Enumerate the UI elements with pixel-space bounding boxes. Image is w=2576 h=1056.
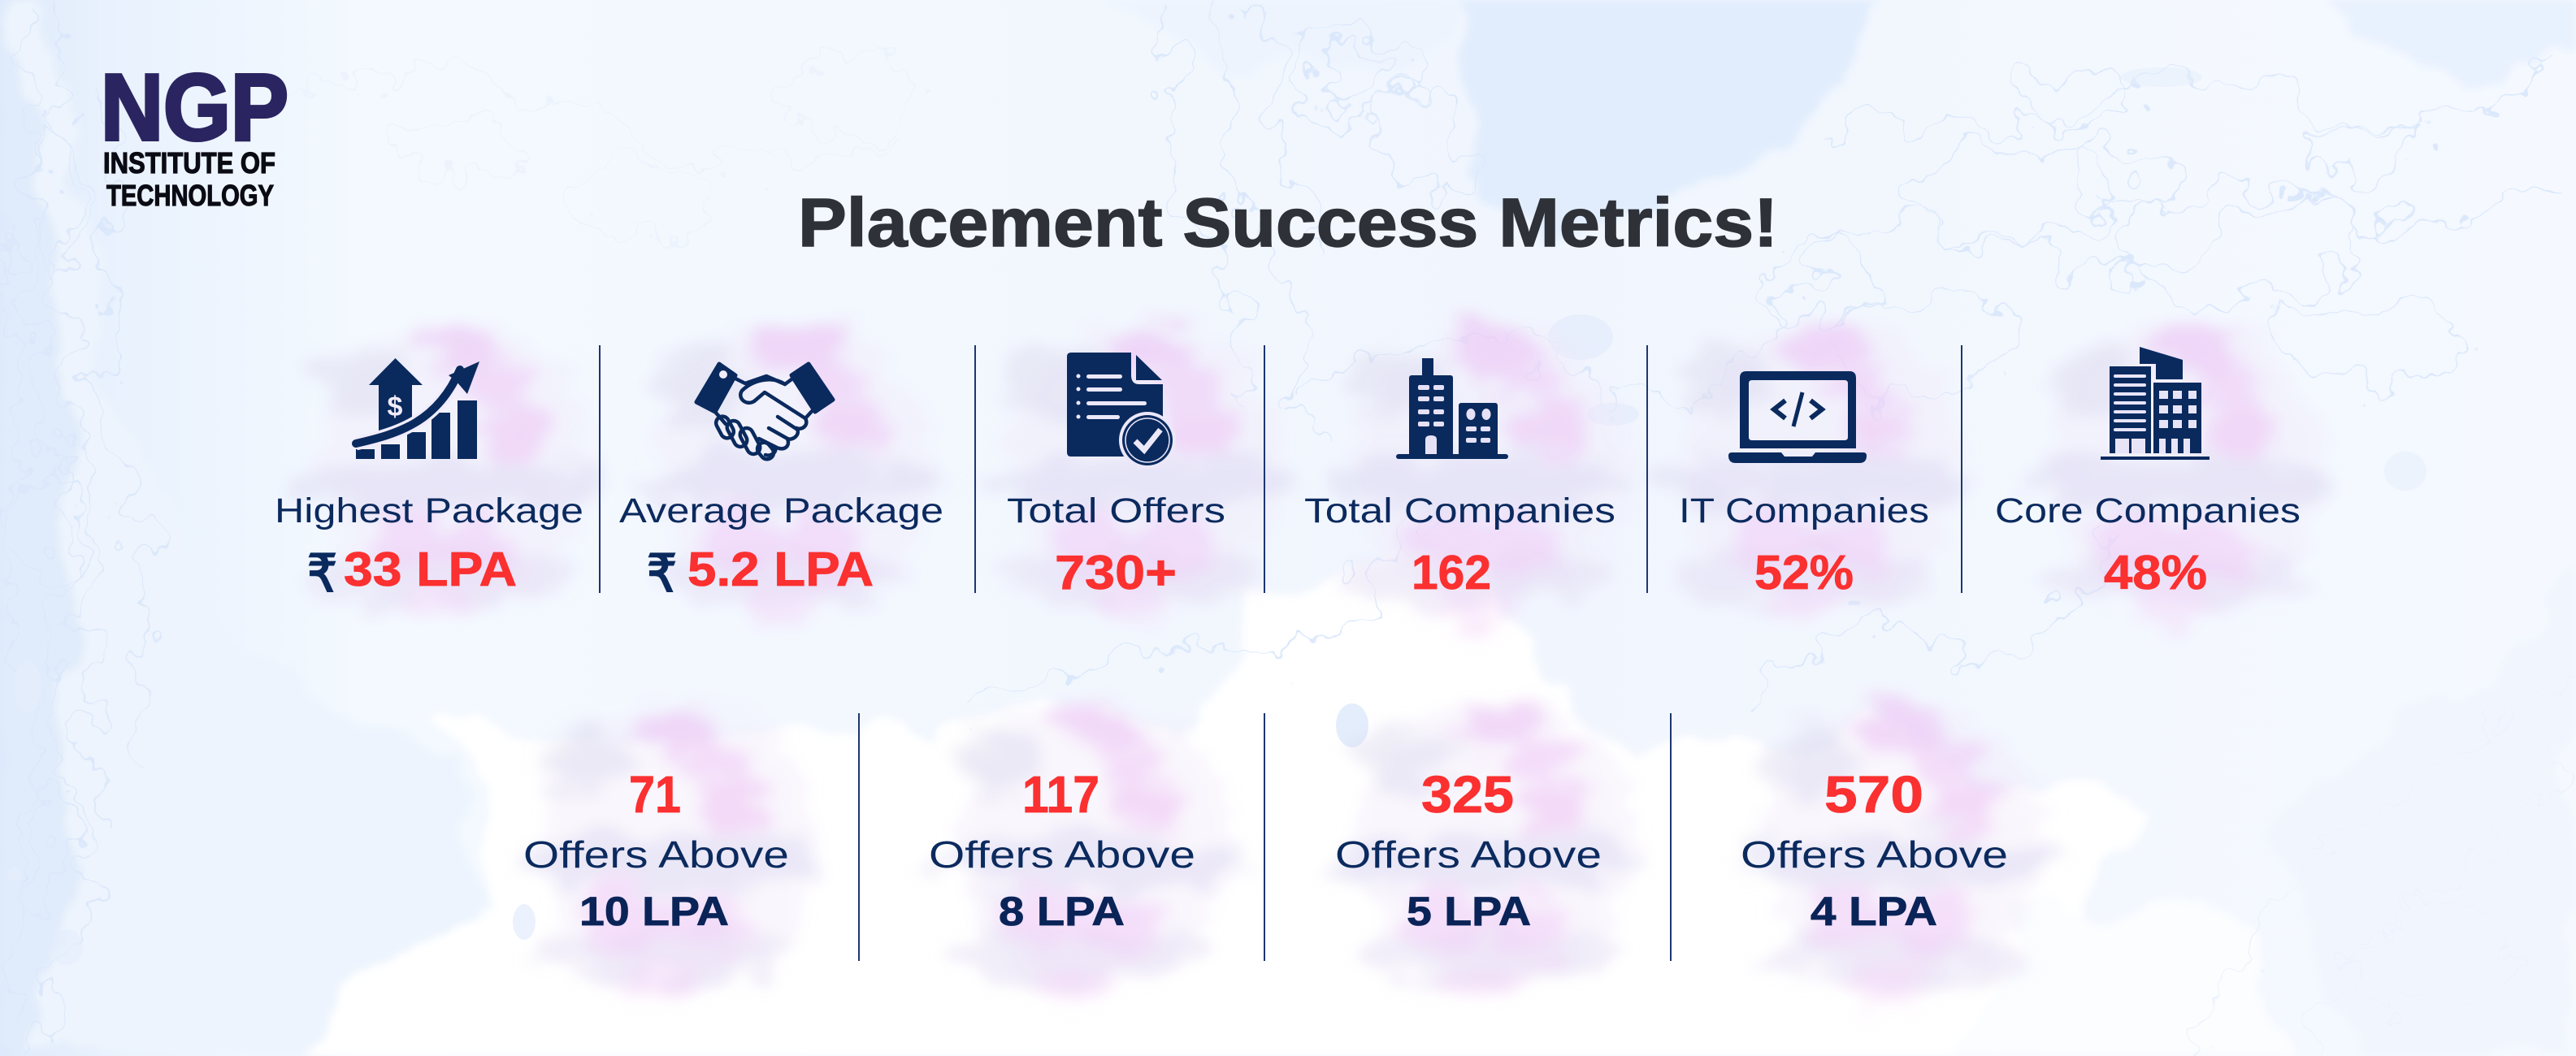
label: Total Offers bbox=[1007, 491, 1225, 530]
logo: NGP bbox=[101, 54, 288, 160]
threshold: 10 LPA bbox=[579, 889, 729, 934]
label: Offers Above bbox=[1335, 833, 1602, 876]
value: 117 bbox=[1022, 765, 1099, 824]
threshold: 4 LPA bbox=[1811, 889, 1937, 934]
threshold: 8 LPA bbox=[999, 889, 1125, 934]
metric: highest package bbox=[275, 358, 583, 603]
icon: handshake bbox=[696, 364, 833, 462]
divider bbox=[1264, 345, 1265, 593]
value: 48% bbox=[2104, 546, 2207, 599]
metric: offers above 10 LPA bbox=[523, 765, 789, 934]
divider bbox=[1646, 345, 1648, 593]
divider bbox=[1961, 345, 1962, 593]
decorative white region bbox=[293, 552, 2316, 1056]
rupee symbol: ₹ bbox=[647, 544, 677, 603]
icon: document with check bbox=[1067, 353, 1176, 469]
icon: rising chart bbox=[356, 358, 479, 459]
value: 730+ bbox=[1055, 546, 1177, 599]
value: 52% bbox=[1754, 546, 1854, 599]
metric: offers above 5 LPA bbox=[1335, 765, 1602, 934]
label: Highest Package bbox=[275, 491, 583, 530]
label: Offers Above bbox=[929, 833, 1195, 876]
icon: office tower bbox=[2101, 347, 2210, 460]
value: 570 bbox=[1824, 765, 1923, 824]
value: 325 bbox=[1421, 765, 1514, 824]
value: 5.2 LPA bbox=[687, 543, 874, 596]
logo bbox=[101, 54, 288, 212]
metric: average package bbox=[619, 364, 943, 603]
divider bbox=[1670, 713, 1672, 961]
metric: core companies bbox=[1995, 347, 2301, 599]
icon: two buildings bbox=[1396, 358, 1508, 459]
label: Offers Above bbox=[523, 833, 789, 876]
label: Total Companies bbox=[1304, 491, 1615, 530]
metric: offers above 4 LPA bbox=[1741, 765, 2008, 934]
divider bbox=[599, 345, 601, 593]
metric: IT companies bbox=[1679, 371, 1929, 599]
label: Average Package bbox=[619, 491, 943, 530]
divider bbox=[858, 713, 860, 961]
threshold: 5 LPA bbox=[1407, 889, 1531, 934]
metric: offers above 8 LPA bbox=[929, 765, 1195, 934]
logo: TECHNOLOGY bbox=[106, 179, 274, 212]
decorative watercolor washes bbox=[288, 321, 2336, 1003]
rupee symbol: ₹ bbox=[307, 544, 337, 603]
label: IT Companies bbox=[1679, 491, 1929, 530]
metric: total offers bbox=[1007, 353, 1225, 599]
value: 33 LPA bbox=[344, 543, 517, 596]
icon: rising chart: $ bbox=[388, 392, 403, 422]
logo: INSTITUTE OF bbox=[103, 146, 275, 180]
title: Placement Success Metrics! bbox=[798, 184, 1778, 261]
divider bbox=[1264, 713, 1265, 961]
value: 71 bbox=[629, 765, 681, 824]
label: Core Companies bbox=[1995, 491, 2301, 530]
label: Offers Above bbox=[1741, 833, 2008, 876]
divider bbox=[974, 345, 976, 593]
icon: laptop with code bbox=[1728, 371, 1867, 463]
metric: total companies bbox=[1304, 358, 1615, 599]
value: 162 bbox=[1412, 546, 1491, 599]
